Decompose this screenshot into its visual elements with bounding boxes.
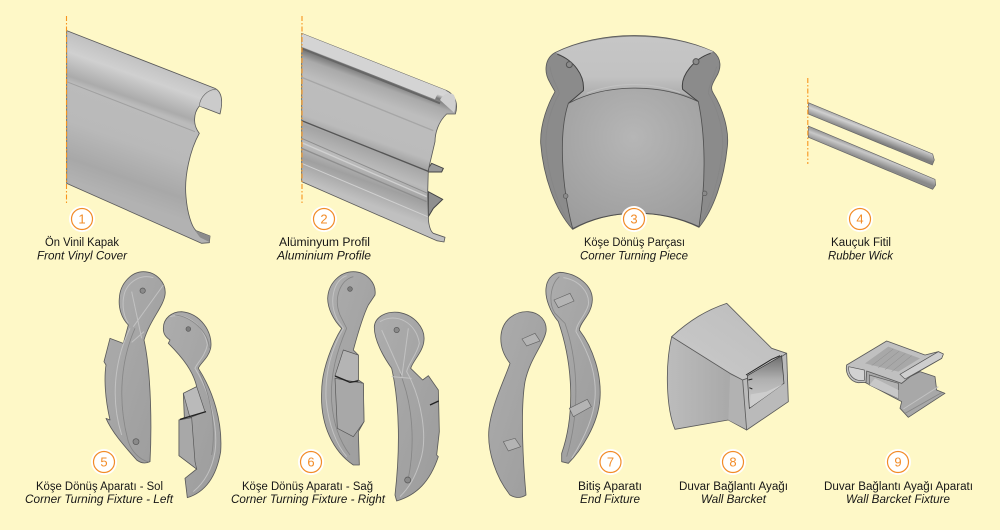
label 4: Rubber Wick: [828, 250, 894, 262]
label 9: Wall Barcket Fixture: [846, 494, 950, 506]
label 5: [25, 481, 174, 506]
label 1: [37, 237, 128, 262]
number badge 8: [720, 449, 746, 475]
label 5: Köşe Dönüş Aparatı - Sol: [36, 481, 163, 493]
number badge 4: 4: [856, 212, 864, 226]
label 3: [580, 237, 688, 262]
label 5: Corner Turning Fixture - Left: [25, 494, 174, 506]
dashed centre line: [301, 16, 303, 203]
label 1: Ön Vinil Kapak: [45, 237, 119, 249]
label 4: Kauçuk Fitil: [831, 237, 891, 249]
dashed centre line: [807, 78, 809, 164]
number badge 3: [621, 206, 647, 232]
number badge 7: [598, 449, 624, 475]
panel: 8 wall bracket: [667, 303, 788, 506]
number badge 9: [885, 449, 911, 475]
illustration: end fixture pair: [489, 272, 600, 497]
label 8: Duvar Bağlantı Ayağı: [679, 481, 788, 493]
number badge 3: 3: [630, 212, 638, 226]
illustration: rubber wick rods: [808, 103, 936, 189]
number badge 6: [298, 449, 324, 475]
label 8: [679, 481, 788, 506]
label 1: Front Vinyl Cover: [37, 250, 128, 262]
label 4: [828, 237, 894, 262]
label 7: Bitiş Aparatı: [578, 481, 642, 493]
illustration: wall bracket: [667, 303, 788, 430]
label 2: Aluminium Profile: [276, 250, 371, 262]
panel: 4 rubber wick: [808, 78, 936, 262]
label 7: [578, 481, 642, 506]
number badge 4: [847, 206, 873, 232]
label 6: Corner Turning Fixture - Right: [231, 494, 386, 506]
illustration: corner piece: [541, 36, 728, 229]
illustration: right fixture pair: [322, 272, 439, 501]
illustration: vinyl cover profile: [67, 31, 222, 243]
label 9: Duvar Bağlantı Ayağı Aparatı: [824, 481, 973, 493]
label 6: Köşe Dönüş Aparatı - Sağ: [242, 481, 373, 493]
number badge 5: 5: [100, 454, 108, 470]
panel: 5 corner turning fixture left: [25, 272, 221, 506]
label 7: End Fixture: [580, 494, 640, 506]
number badge 5: [91, 449, 117, 475]
label 2: [276, 237, 371, 262]
panel: 9 wall bracket fixture: [824, 341, 973, 506]
label 3: Corner Turning Piece: [580, 250, 688, 262]
number badge 1: 1: [78, 212, 86, 226]
label 6: [231, 481, 386, 506]
panel: 1 front vinyl cover: [37, 16, 222, 262]
number badge 9: 9: [894, 454, 902, 470]
number badge 6: 6: [307, 454, 315, 470]
number badge 2: [311, 206, 337, 232]
label 3: Köşe Dönüş Parçası: [584, 237, 685, 249]
number badge 8: 8: [729, 454, 737, 470]
number badge 7: 7: [607, 454, 614, 470]
illustration: left fixture pair: [104, 272, 221, 498]
panel: 3 corner turning piece: [541, 36, 728, 262]
panel: 7 end fixture: [489, 272, 642, 506]
panel: 2 aluminium profile: [276, 16, 457, 262]
illustration: aluminium profile: [302, 33, 457, 242]
label 8: Wall Barcket: [701, 494, 767, 506]
dashed centre line: [66, 16, 68, 203]
number badge 1: [69, 206, 95, 232]
label 9: [824, 481, 973, 506]
panel: 6 corner turning fixture right: [231, 272, 439, 506]
label 2: Alüminyum Profil: [279, 237, 370, 249]
number badge 2: 2: [320, 212, 328, 226]
illustration: wall bracket fixture: [846, 341, 945, 417]
